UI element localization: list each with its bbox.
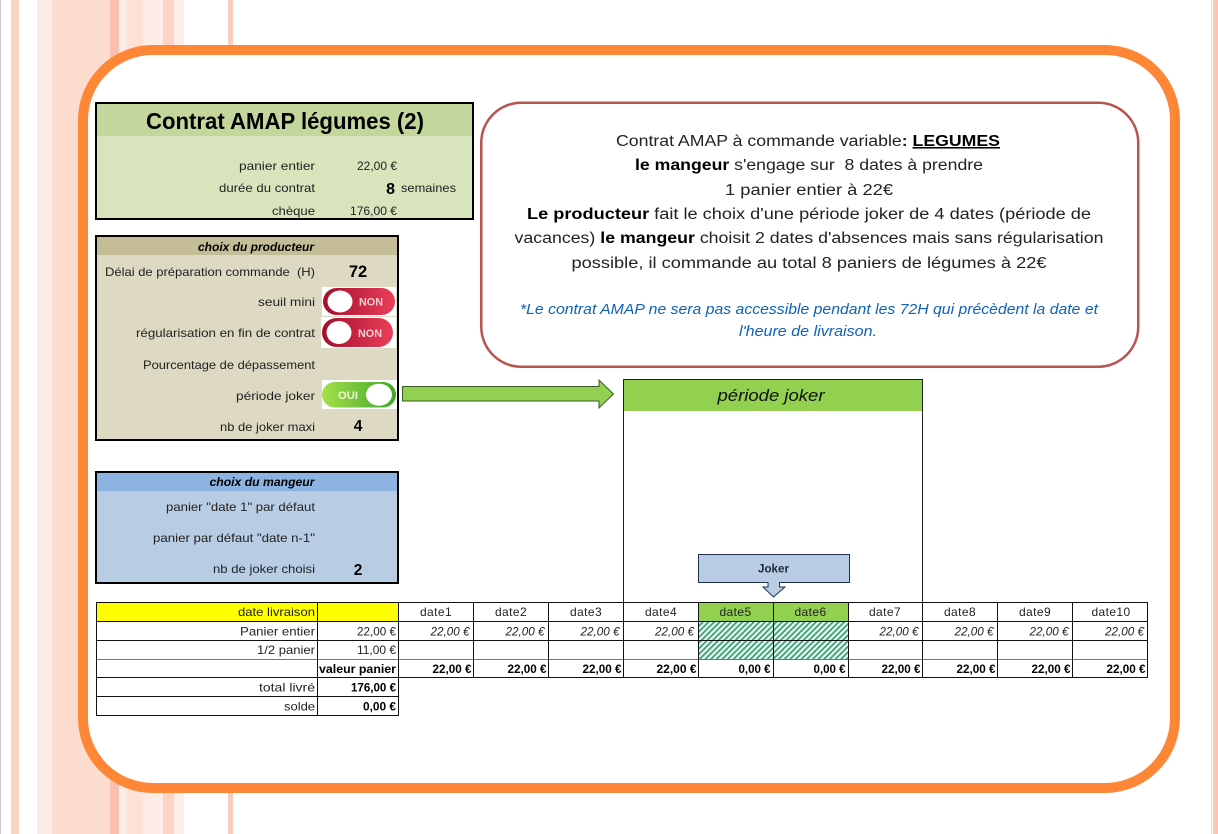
date headers: date8 (944, 605, 976, 619)
panier entier values: 22,00 € (504, 626, 545, 638)
description text: Contrat AMAP à commande variable : LEGUMES (616, 133, 1000, 150)
value: 2: 2 (354, 562, 362, 579)
note on 72H: l'heure de livraison. (739, 324, 877, 340)
heading: choix du producteur: choix du producteur (198, 242, 315, 254)
valeur panier values: 22,00 € (432, 664, 472, 676)
panel: periode joker (623, 379, 923, 602)
toggle: periode joker OUI (322, 380, 397, 409)
panel: choix du producteur (96, 236, 398, 440)
eater labels: nb de joker choisi (213, 562, 315, 576)
toggle: seuil mini NON (322, 287, 396, 316)
panel: contract description (481, 103, 1138, 367)
valeur panier values: 22,00 € (882, 664, 921, 676)
row labels (238, 605, 396, 714)
date headers: date4 (645, 605, 677, 619)
row labels: solde (284, 700, 315, 714)
contract values: 176,00 € (350, 204, 397, 218)
producer labels: période joker (236, 389, 315, 403)
toggle: regularisation NON: NON (358, 328, 382, 340)
panier entier values (429, 626, 1145, 638)
contract values: durée du contrat (219, 181, 316, 195)
valeur panier values (432, 664, 1146, 676)
producer labels: Pourcentage de dépassement (143, 358, 316, 372)
callout: Joker (698, 554, 850, 597)
producer labels (105, 265, 316, 434)
eater labels (153, 500, 316, 576)
eater labels: panier par défaut "date n-1" (153, 531, 315, 545)
valeur panier values: 0,00 € (738, 664, 771, 676)
panier entier values: 22,00 € (953, 626, 994, 638)
table: delivery schedule (96, 602, 1148, 716)
value: 4: 4 (354, 418, 363, 435)
valeur panier values: 0,00 € (814, 664, 846, 676)
row labels: valeur panier (319, 662, 396, 676)
base prices and totals (351, 624, 396, 714)
table grid (96, 602, 1148, 716)
row labels: total livré (259, 680, 315, 694)
base prices and totals: 0,00 € (363, 700, 396, 714)
callout: Joker: Joker (758, 562, 789, 576)
panier entier values: 22,00 € (654, 626, 695, 638)
contract values: panier entier (239, 159, 315, 173)
description text: 1 panier entier à 22€ (725, 182, 893, 199)
eater labels: panier "date 1" par défaut (166, 500, 316, 514)
valeur panier values: 22,00 € (508, 664, 547, 676)
producer labels: seuil mini (258, 295, 315, 309)
description text: possible, il commande au total 8 paniers de légumes à 22€ (572, 255, 1047, 272)
contract values: 22,00 € (357, 159, 397, 173)
heading: contract title: Contrat AMAP légumes (2) (146, 108, 424, 134)
valeur panier values: 22,00 € (656, 664, 697, 676)
heading: choix du mangeur: choix du mangeur (210, 477, 315, 489)
toggle: periode joker OUI: OUI (338, 390, 358, 402)
highlighted cells (97, 603, 848, 659)
producer labels: Délai de préparation commande (H) (105, 265, 315, 279)
panier entier values: 22,00 € (429, 626, 470, 638)
contract values: chèque (272, 204, 315, 218)
date headers (420, 605, 1131, 619)
valeur panier values: 22,00 € (1032, 664, 1071, 676)
panier entier values: 22,00 € (1028, 626, 1069, 638)
row labels: 1/2 panier (257, 643, 315, 657)
contract values (219, 159, 456, 218)
heading: periode joker: période joker (716, 386, 826, 405)
date headers: date1 (420, 605, 452, 619)
valeur panier values: 22,00 € (956, 664, 996, 676)
description text: le mangeur s'engage sur 8 dates à prendre (635, 157, 983, 174)
toggle: regularisation NON (321, 317, 396, 348)
panier entier values: 22,00 € (579, 626, 620, 638)
contract values: semaines (401, 181, 456, 195)
base prices and totals: 22,00 € (357, 624, 396, 638)
description text: vacances) le mangeur choisit 2 dates d'absences mais sans régularisation (514, 230, 1104, 247)
toggle: seuil mini NON: NON (359, 296, 383, 308)
valeur panier values: 22,00 € (582, 664, 622, 676)
note on 72H (520, 302, 1099, 340)
valeur panier values: 22,00 € (1106, 664, 1146, 676)
row labels: Panier entier (240, 624, 315, 638)
orange rounded frame (83, 50, 1175, 788)
description text (514, 133, 1104, 272)
date headers: date5 (719, 605, 752, 619)
panier entier values: 22,00 € (878, 626, 919, 638)
date headers: date9 (1019, 605, 1051, 619)
panier entier values: 22,00 € (1104, 626, 1145, 638)
contract values: 8 (386, 181, 395, 198)
date headers: date2 (495, 605, 527, 619)
note on 72H: *Le contrat AMAP ne sera pas accessible pendant les 72H qui précèdent la date et (520, 302, 1099, 318)
producer labels: nb de joker maxi (220, 420, 315, 434)
arrow: to periode joker (402, 380, 614, 408)
panel: contract summary (96, 103, 473, 219)
date headers: date7 (869, 605, 901, 619)
producer labels: régularisation en fin de contrat (136, 326, 316, 340)
row labels: date livraison (238, 605, 315, 619)
value: 72: 72 (349, 263, 367, 281)
date headers: date6 (794, 605, 827, 619)
date headers: date10 (1091, 605, 1131, 619)
base prices and totals: 11,00 € (357, 643, 396, 657)
panel: choix du mangeur (96, 472, 398, 583)
base prices and totals: 176,00 € (351, 680, 396, 694)
date headers: date3 (570, 605, 602, 619)
description text: Le producteur fait le choix d'une période joker de 4 dates (période de (527, 206, 1091, 223)
